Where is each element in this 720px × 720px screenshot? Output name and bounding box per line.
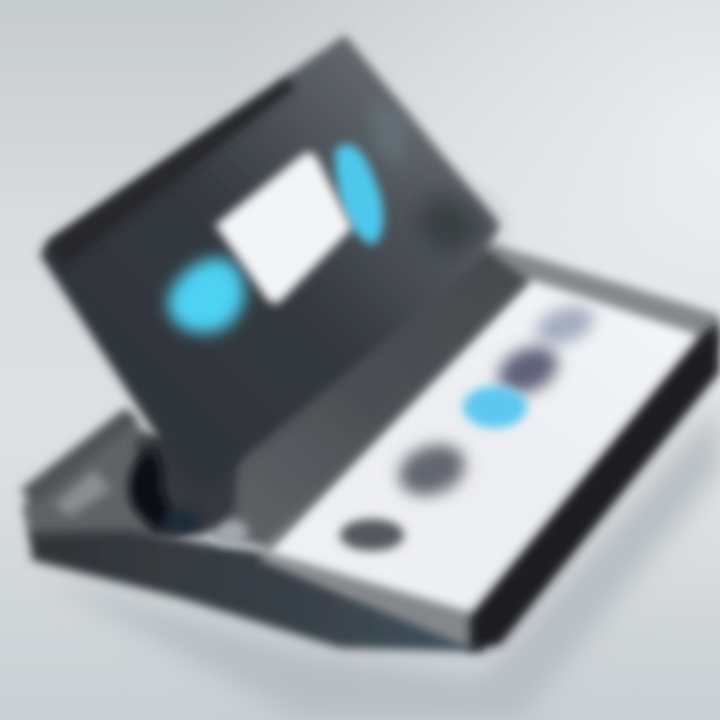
icon: lower screen tile top [531, 299, 599, 351]
icon: lower screen cyan [463, 386, 527, 428]
icon: lower screen tile dark [491, 338, 565, 402]
cyan blob left [168, 258, 245, 333]
base shadow [40, 400, 720, 720]
upper panel dark edge [50, 78, 295, 268]
hinge band [180, 245, 528, 548]
white window on screen [215, 152, 352, 304]
lower panel right edge [470, 322, 720, 650]
rear stand [20, 408, 180, 540]
lower panel frame [260, 243, 720, 648]
hinge roller [129, 450, 200, 534]
icon: lower screen grey tile [392, 436, 472, 504]
screen light streak [370, 100, 410, 170]
cyan blob right [335, 144, 383, 245]
upper panel corner shade [410, 185, 495, 260]
lower panel white screen [268, 280, 698, 612]
roller backing [135, 420, 240, 535]
device base edge [30, 530, 485, 652]
upper panel outer [40, 35, 500, 490]
hinge highlight [212, 519, 248, 545]
icon: lower screen dark pill [340, 519, 404, 551]
